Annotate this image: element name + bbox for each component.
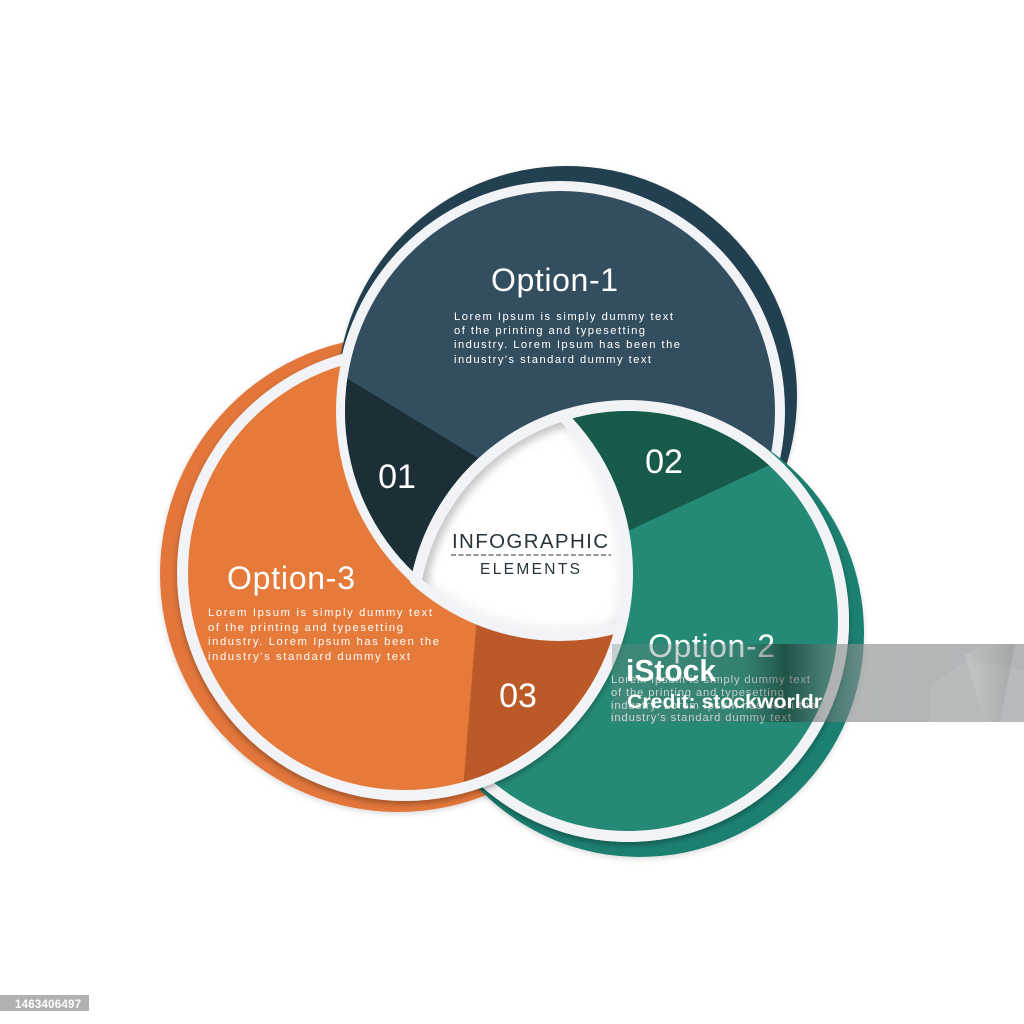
wedge: segment 03 xyxy=(464,624,614,782)
text block: option 3 xyxy=(208,607,439,663)
circle: option 2 (green) xyxy=(407,390,864,857)
number 01: 01 xyxy=(378,458,416,496)
text block: option 2: Lorem Ipsum is simply dummy text xyxy=(611,674,811,686)
watermark: credit: Credit: stockworldr xyxy=(627,692,823,713)
number 03: 03 xyxy=(499,677,537,715)
number 02: 02 xyxy=(645,443,683,481)
heading: option 3: Option-3 xyxy=(227,560,355,596)
heading: option 2: Option-2 xyxy=(648,628,775,664)
text block: option 3: industry's standard dummy text xyxy=(208,651,411,663)
watermark band xyxy=(612,644,1024,722)
text block: option 1: of the printing and typesetting xyxy=(454,325,645,337)
text block: option 3: of the printing and typesetting xyxy=(208,622,403,634)
stock id tag: 1463406497 xyxy=(15,999,81,1011)
text block: option 2: industry. Lorem Ipsum has been the xyxy=(611,700,816,712)
heading: option 1: Option-1 xyxy=(491,262,618,298)
wedge: segment 02 xyxy=(572,411,769,530)
center title xyxy=(451,530,611,578)
wedge: segment 01 xyxy=(345,378,478,572)
text block: option 2: industry's standard dummy text xyxy=(611,712,792,724)
text block: option 1: Lorem Ipsum is simply dummy text xyxy=(454,311,674,323)
stock id tag xyxy=(0,995,89,1011)
back disc: option 3 xyxy=(160,336,636,812)
circle: option 1 (navy) xyxy=(336,181,785,582)
text block: option 2: of the printing and typesetting xyxy=(611,687,784,699)
text block: option 1 xyxy=(454,311,680,366)
text block: option 1: industry. Lorem Ipsum has been the xyxy=(454,339,680,351)
circle: option 3 (orange) xyxy=(177,345,650,801)
text block: option 3: industry. Lorem Ipsum has been the xyxy=(208,636,439,648)
watermark: iStock: iStock xyxy=(626,653,717,688)
center title: INFOGRAPHIC xyxy=(452,530,608,553)
center panel xyxy=(410,410,633,641)
text block: option 1: industry's standard dummy text xyxy=(454,354,652,366)
center title: ELEMENTS xyxy=(480,561,580,578)
text block: option 3: Lorem Ipsum is simply dummy text xyxy=(208,607,433,619)
back disc: option 1 xyxy=(337,166,797,626)
text block: option 2 xyxy=(611,674,816,724)
